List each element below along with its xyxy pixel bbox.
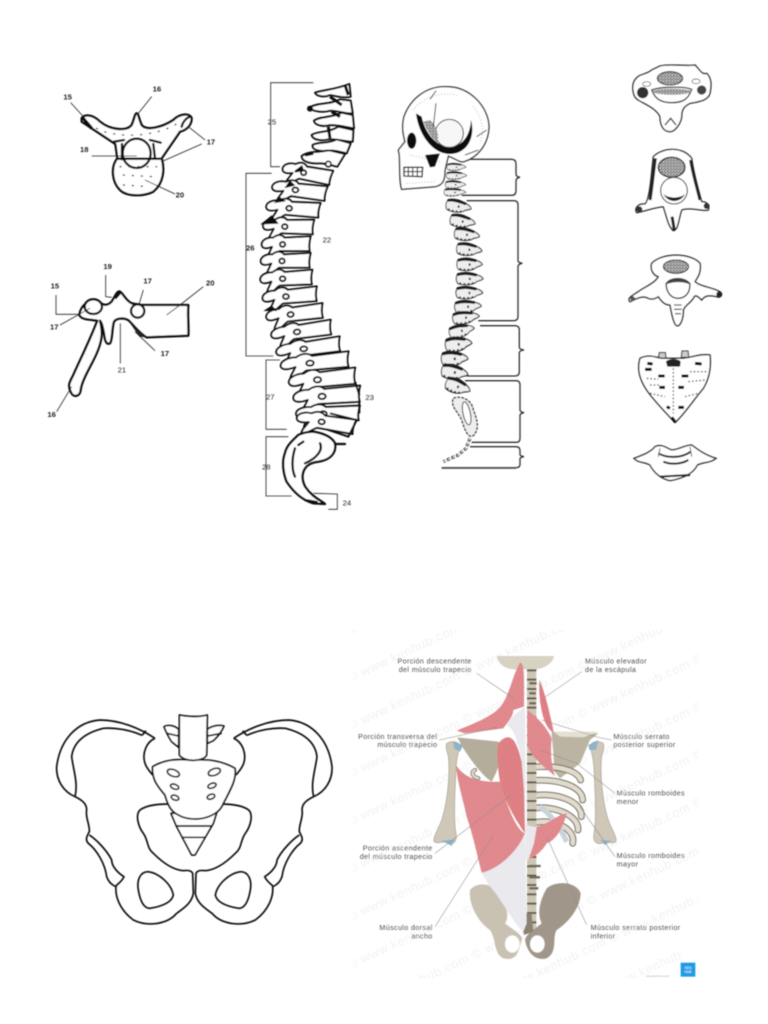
labels right: posterior superior xyxy=(613,741,676,749)
sacrum and coccyx xyxy=(283,432,345,504)
vertebra top view xyxy=(82,113,192,195)
diagram: pelvis outline xyxy=(57,715,332,924)
credit: www.kenhub.com xyxy=(646,974,670,978)
rhomboid muscles xyxy=(527,710,555,776)
labels: Porción transversa del xyxy=(358,733,437,741)
labels right: Músculo serrato posterior xyxy=(591,924,681,932)
diagram: spine lateral with brackets xyxy=(246,83,374,509)
vertebra top view labels: 15 xyxy=(63,92,73,101)
brackets: 28 xyxy=(262,462,271,471)
diagram: skull and spine with empty brackets xyxy=(398,87,524,468)
brackets: 23 xyxy=(365,393,374,402)
brackets: 26 xyxy=(246,243,255,252)
labels: del músculo trapecio xyxy=(399,666,472,674)
diagram: five vertebra types xyxy=(629,65,722,481)
labels right: de la escápula xyxy=(585,666,636,674)
vertebra top view labels: 16 xyxy=(153,85,161,94)
labels right: mayor xyxy=(617,860,639,868)
brackets xyxy=(246,83,374,509)
vertebra side view labels: 17 xyxy=(143,276,152,285)
watermark: © www.kenhub.com © www.kenhub.com © www.kenhub.com © www.kenhub xyxy=(345,664,768,876)
vertebra top view labels: 18 xyxy=(80,145,89,154)
labels: Músculo dorsal xyxy=(379,924,433,932)
bones: skull base, arms, scapulae xyxy=(434,656,616,846)
vertebra top view labels xyxy=(63,85,215,200)
watermark: © www.kenhub.com © www.kenhub.com © www.kenhub.com © www.kenhub xyxy=(346,425,768,637)
diagram: labelled vertebrae xyxy=(47,85,215,419)
watermark: © www.kenhub.com © www.kenhub.com © www.kenhub.com © www.kenhub xyxy=(345,712,768,924)
trapezius lower xyxy=(497,737,525,833)
lumbar vertebra with processes xyxy=(164,715,224,760)
brackets: 24 xyxy=(343,498,352,507)
watermark: © www.kenhub.com © www.kenhub.com © www.kenhub.com © www.kenhub xyxy=(345,472,768,685)
labels: músculo trapecio xyxy=(377,741,437,749)
levator scapulae xyxy=(539,680,554,733)
sacrum xyxy=(639,351,710,423)
watermark: © www.kenhub.com © www.kenhub.com © www.kenhub.com © www.kenhub xyxy=(345,520,768,733)
logo: KEN xyxy=(685,966,692,970)
labels: Porción descendente xyxy=(397,658,472,666)
lumbar vertebra xyxy=(629,255,722,326)
brackets: 25 xyxy=(268,117,276,126)
latissimus dorsi muscle xyxy=(456,765,525,873)
labels right: Músculo romboides xyxy=(617,852,685,860)
vertebra side view labels: 16 xyxy=(47,410,56,419)
vertebra side view labels: 15 xyxy=(51,281,60,290)
vertebra side view labels: 19 xyxy=(103,262,112,271)
vertebra side view labels: 17 xyxy=(50,322,59,331)
logo xyxy=(681,963,695,977)
empty label brackets xyxy=(442,159,524,468)
vertebra side view labels: 20 xyxy=(206,278,215,287)
brackets: 22 xyxy=(323,236,331,245)
labels right: menor xyxy=(617,798,639,806)
watermark: © www.kenhub.com © www.kenhub.com © www.kenhub.com © www.kenhub xyxy=(345,759,768,972)
brackets: 27 xyxy=(266,392,275,401)
labels: ancho xyxy=(411,933,433,941)
watermark: © www.kenhub.com © www.kenhub.com © www.kenhub.com © www.kenhub xyxy=(345,616,768,829)
vertebra side view labels: 21 xyxy=(118,366,126,375)
vertebra side view labels xyxy=(47,262,215,419)
labels right xyxy=(585,658,685,940)
white aponeurosis xyxy=(481,707,527,932)
sacral foramina xyxy=(166,767,221,801)
vertebra top view labels: 17 xyxy=(207,137,215,146)
vertebral column xyxy=(440,163,483,462)
cervical vertebrae xyxy=(302,84,354,167)
skull xyxy=(398,87,489,189)
vertebra top view labels: 20 xyxy=(176,191,184,200)
labels right: Músculo elevador xyxy=(585,658,647,666)
labels: del músculo trapecio xyxy=(360,853,433,861)
watermark: © www.kenhub.com © www.kenhub.com xyxy=(492,881,724,999)
labels right: inferior xyxy=(591,932,616,940)
labels xyxy=(358,658,472,941)
left hip bone xyxy=(57,720,193,924)
right hip bone xyxy=(195,720,332,924)
diagram: back muscles illustration xyxy=(358,630,698,978)
watermark: © www.kenhub.com © www.kenhub.com © www.kenhub.com © www.kenhub xyxy=(346,568,768,781)
labels right: Músculo serrato xyxy=(613,733,670,741)
labels: Porción ascendente xyxy=(363,845,433,853)
vertebra side view xyxy=(69,291,188,396)
pelvis bones xyxy=(470,883,581,959)
coccyx xyxy=(171,813,217,855)
lumbar vertebrae xyxy=(288,366,362,443)
cervical vertebra xyxy=(633,65,711,132)
coccygeal vertebra xyxy=(634,445,716,481)
vertebra side view labels: 17 xyxy=(161,349,169,358)
trapezius upper and transverse xyxy=(457,663,524,733)
logo: HUB xyxy=(684,970,692,974)
vertebral column xyxy=(529,669,541,930)
watermark: © www.kenhub xyxy=(594,948,684,1000)
leader lines xyxy=(435,672,615,927)
thoracic vertebrae xyxy=(260,159,351,382)
serratus posterior inferior xyxy=(527,813,567,859)
thoracic vertebra xyxy=(636,149,710,231)
rib cage xyxy=(472,767,583,843)
watermark xyxy=(362,630,698,978)
sacrum xyxy=(153,760,235,819)
labels right: Músculo romboides xyxy=(617,790,685,798)
